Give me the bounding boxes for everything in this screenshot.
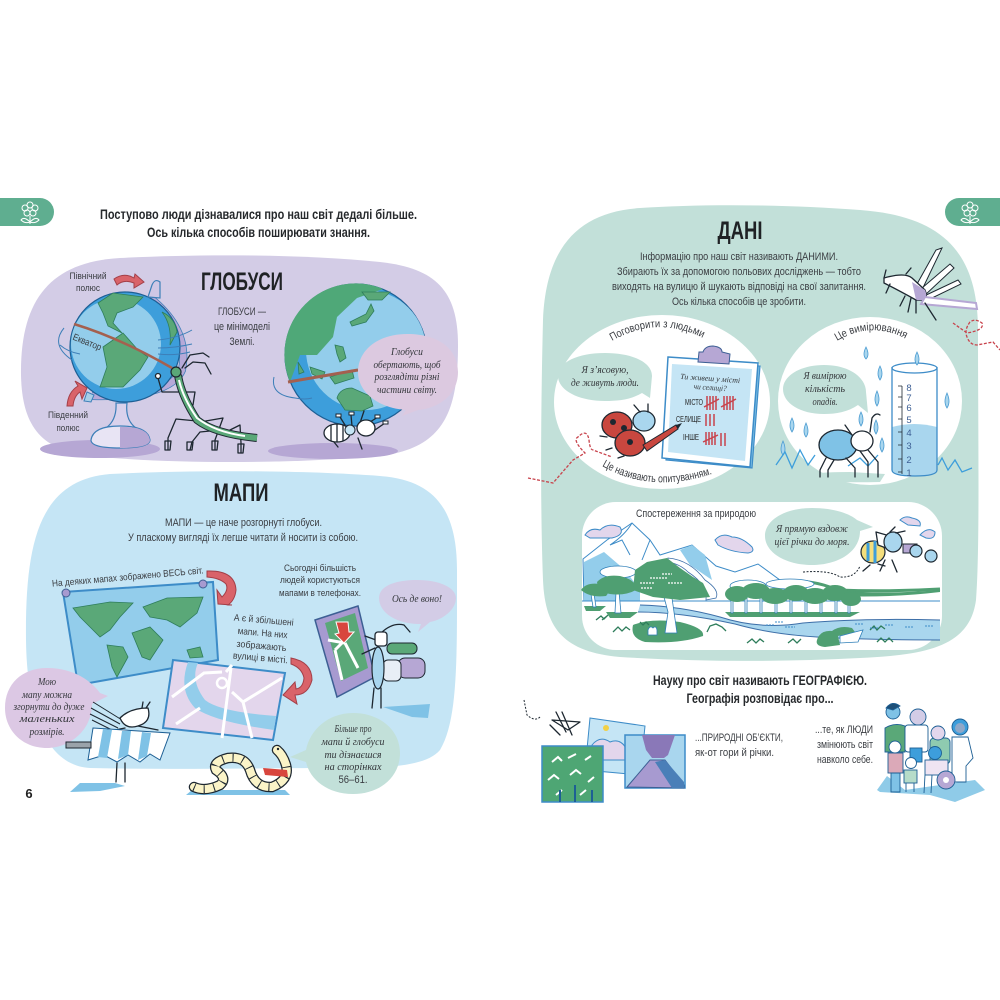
- speech bubble: fold map: згорнути до дуже: [13, 702, 85, 713]
- map: world: [62, 580, 218, 685]
- speech bubble: more about maps: Більше про: [334, 724, 372, 735]
- text: zoomed-in maps: вулиці в місті.: [233, 651, 288, 666]
- illustration: clouds: [585, 517, 935, 553]
- speech bubble: here it is: [379, 580, 456, 632]
- text: data definition: виходять на вулицю й шукають відповіді на свої запитання.: [612, 281, 866, 293]
- illustration: measuring cylinder: 5: [906, 415, 912, 426]
- text: phones: мапами в телефонах.: [279, 588, 361, 599]
- picture: forest: [542, 746, 603, 802]
- illustration: measuring cylinder: 3: [906, 441, 912, 452]
- speech bubble: I find out: де живуть люди.: [571, 378, 639, 389]
- arrow: to city map: [283, 658, 312, 704]
- speech bubble: I find out: [558, 353, 652, 401]
- illustration: clipboard survey: СЕЛИЩЕ: [676, 415, 701, 424]
- intro heading: Ось кілька способів поширювати знання.: [147, 224, 370, 240]
- illustration: bee with binoculars: [861, 527, 937, 572]
- text: people change the world: навколо себе.: [817, 754, 873, 766]
- text: data definition: Ось кілька способів це зробити.: [672, 296, 806, 308]
- illustration: right globe: [273, 283, 427, 426]
- illustration: measuring cylinder: 1: [906, 468, 912, 479]
- illustration: clipboard survey: чи селищі?: [693, 382, 727, 393]
- speech bubble: I measure: кількість: [805, 384, 845, 395]
- text: zoomed-in maps: [230, 612, 294, 667]
- circle: talk to people: [554, 315, 770, 489]
- tab: left section marker: [0, 198, 54, 226]
- speech bubble: here it is: Ось де воно!: [392, 594, 442, 605]
- speech bubble: following river: цієї річки до моря.: [774, 537, 850, 548]
- text: geography heading: Географія розповідає про...: [686, 690, 834, 706]
- illustration: left globe on stand: [59, 281, 192, 448]
- text: data definition: Збирають їх за допомогою польових досліджень — тобто: [617, 266, 861, 278]
- text: zoomed-in maps: А є й збільшені: [233, 612, 294, 629]
- speech bubble: fold map: маленьких: [18, 714, 75, 725]
- arrow: to south pole: [67, 381, 87, 406]
- illustration: hills and river: [582, 582, 940, 640]
- panel: data: [524, 205, 1000, 803]
- text: natural objects: [695, 732, 783, 759]
- text: globes definition: Землі.: [230, 336, 254, 348]
- illustration: grass: [776, 450, 972, 472]
- speech bubble: globes rotate: розглядіти різні: [374, 372, 440, 383]
- speech bubble: globes rotate: [358, 334, 458, 416]
- illustration: measuring cylinder: [892, 352, 937, 479]
- text: globes definition: ГЛОБУСИ —: [218, 306, 266, 318]
- panel: globes: [21, 255, 458, 462]
- shadow: insect ground: [70, 783, 125, 792]
- tab: right section marker: [945, 198, 1000, 226]
- text: people change the world: [815, 724, 873, 766]
- speech bubble: globes rotate: Глобуси: [390, 347, 423, 358]
- title: data: ДАНІ: [718, 217, 762, 245]
- arrow: to world map: [207, 571, 236, 605]
- picture: clouds: [585, 718, 645, 775]
- panel: maps: [5, 471, 457, 795]
- intro heading: Поступово люди дізнавалися про наш світ дедалі більше.: [100, 206, 417, 222]
- text: natural objects: як-от гори й річки.: [695, 747, 774, 759]
- panel: nature observation: [581, 502, 942, 650]
- illustration: measuring cylinder: 2: [906, 455, 912, 466]
- illustration: grass and bushes: [596, 615, 933, 647]
- title: globes: ГЛОБУСИ: [201, 268, 283, 296]
- text: phones: [279, 563, 361, 599]
- shadow: hiker ground: [383, 704, 430, 718]
- shadow: beetle ground: [790, 472, 885, 482]
- illustration: insect with folded map: [66, 702, 170, 782]
- label: south pole: полюс: [56, 423, 80, 434]
- label: talk to people: Поговорити з людьми: [609, 321, 705, 340]
- arrow: to north pole: [114, 274, 144, 288]
- speech bubble: more about maps: мапи й глобуси: [321, 737, 384, 748]
- label: south pole: Південний: [48, 410, 88, 421]
- page number: 6: [25, 786, 33, 801]
- text: geography heading: [653, 672, 867, 706]
- text: zoomed-in maps: мапи. На них: [237, 626, 288, 641]
- illustration: mosquito with dashed path: [524, 700, 580, 735]
- speech bubble: I find out: Я з’ясовую,: [581, 365, 628, 376]
- speech bubble: more about maps: на сторінках: [324, 762, 382, 773]
- text: zoomed-in maps: зображають: [236, 639, 287, 654]
- illustration: hiker insect with backpack: [362, 624, 425, 708]
- speech bubble: I measure: [783, 365, 868, 414]
- speech bubble: fold map: Мою: [37, 677, 56, 688]
- text: phones: людей користуються: [280, 575, 360, 586]
- speech bubble: more about maps: [290, 713, 400, 794]
- text: data definition: [612, 251, 866, 308]
- illustration: large tree: [632, 558, 717, 642]
- illustration: clipboard survey: [662, 346, 760, 468]
- text: geography heading: Науку про світ називають ГЕОГРАФІЄЮ.: [653, 672, 867, 688]
- speech bubble: more about maps: ти дізнаєшся: [324, 750, 382, 761]
- label: north pole: Північний: [70, 271, 106, 282]
- shadow under globe stand: [40, 440, 160, 458]
- illustration: measuring cylinder: 4: [906, 428, 912, 439]
- picture: volcano: [625, 735, 685, 788]
- speech bubble: I measure: Я вимірюю: [803, 371, 847, 382]
- speech bubble: I measure: опадів.: [812, 397, 838, 408]
- text: phones: Сьогодні більшість: [284, 563, 356, 574]
- title: maps: МАПИ: [214, 479, 268, 507]
- illustration: phone: [315, 606, 375, 697]
- illustration: ant under globe: [324, 411, 388, 449]
- label: survey: Це називають опитуванням.: [602, 460, 712, 484]
- speech bubble: globes rotate: обертають, щоб: [374, 360, 441, 371]
- illustration: group of people: [877, 703, 985, 802]
- circle: measuring: [581, 317, 972, 650]
- illustration: clipboard survey: Ти живеш у місті: [680, 372, 740, 385]
- label: world maps: На деяких мапах зображено ВЕСЬ світ.: [52, 565, 204, 590]
- label: north pole: [70, 271, 106, 294]
- illustration: mountains: [583, 523, 784, 601]
- text: maps definition: МАПИ — це наче розгорнуті глобуси.: [165, 517, 322, 529]
- label: north pole: полюс: [76, 283, 100, 294]
- text: maps definition: [128, 517, 358, 544]
- text: globes definition: це мінімоделі: [214, 321, 270, 333]
- speech bubble: following river: Я прямую вздовж: [775, 524, 848, 535]
- illustration: clipboard survey: МІСТО: [685, 398, 703, 407]
- illustration: measuring cylinder: 7: [906, 393, 912, 404]
- illustration: dragonfly: [884, 248, 977, 320]
- decorative flight path: ladybird: [528, 433, 612, 483]
- map: city: [163, 660, 285, 740]
- speech bubble: fold map: розмірів.: [29, 727, 64, 738]
- shadow: worm ground: [186, 790, 290, 795]
- text: people change the world: ...те, як ЛЮДИ: [815, 724, 873, 736]
- label: nature observation: Спостереження за природою: [636, 508, 756, 520]
- text: natural objects: ...ПРИРОДНІ ОБ’ЄКТИ,: [695, 732, 783, 744]
- illustration: measuring cylinder: 8: [906, 383, 912, 394]
- intro heading: [100, 206, 417, 240]
- label: measuring: Це вимірювання: [834, 322, 908, 340]
- text: maps definition: У пласкому вигляді їх легше читати й носити із собою.: [128, 532, 358, 544]
- illustration: stick insect: [156, 353, 257, 453]
- speech bubble: fold map: [5, 668, 108, 748]
- illustration: measuring cylinder: 6: [906, 403, 912, 414]
- label: south pole: [48, 410, 88, 434]
- shadow under right globe: [268, 443, 398, 459]
- illustration: clipboard survey: ІНШЕ: [683, 433, 699, 442]
- illustration: raindrops: [781, 347, 949, 455]
- decorative flight path: bee: [803, 566, 860, 577]
- illustration: left trees: [581, 566, 638, 618]
- decorative flight path: dragonfly: [953, 320, 1000, 350]
- text: data definition: Інформацію про наш світ називають ДАНИМИ.: [640, 251, 838, 263]
- speech bubble: globes rotate: частини світу.: [377, 385, 437, 396]
- illustration: worm: [194, 748, 288, 789]
- illustration: beetle: [819, 414, 880, 477]
- text: globes definition: [214, 306, 270, 348]
- speech bubble: more about maps: 56–61.: [338, 774, 368, 786]
- text: people change the world: змінюють світ: [817, 739, 873, 751]
- illustration: forest row: [725, 579, 861, 617]
- speech bubble: following river: [765, 508, 873, 565]
- speech bubble: fold map: мапу можна: [21, 690, 72, 701]
- label: equator: Екватор: [71, 332, 103, 353]
- illustration: ladybird with pencil: [600, 404, 682, 458]
